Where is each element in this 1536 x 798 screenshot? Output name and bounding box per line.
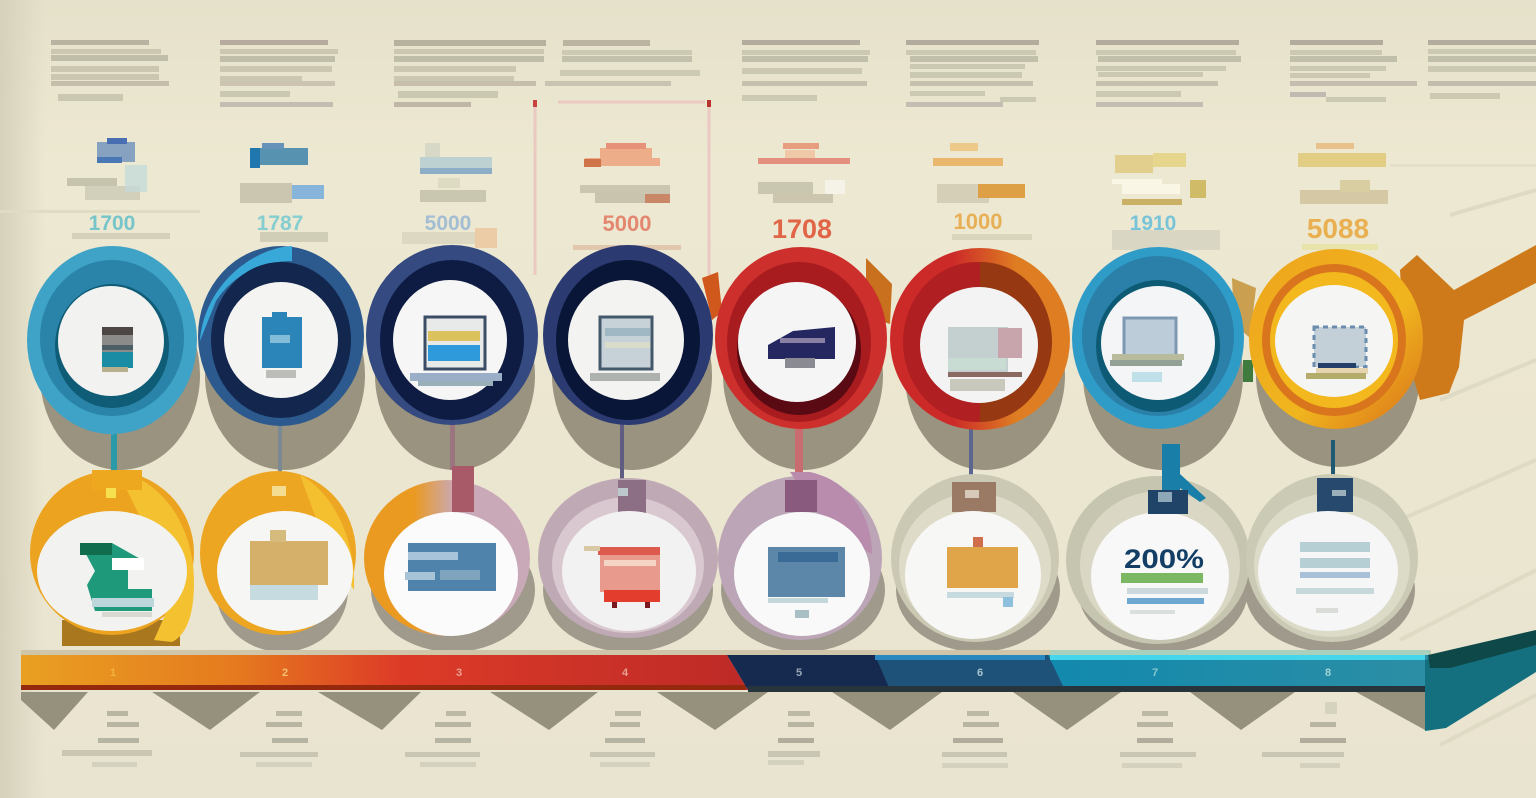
lower ring shadows — [216, 528, 1415, 652]
ring 8 — [1249, 249, 1423, 429]
icon: blue panel — [768, 547, 845, 618]
ring 2 — [198, 246, 364, 426]
caption 2 — [240, 711, 318, 767]
header 2 — [240, 143, 328, 242]
caption 1 — [62, 711, 152, 767]
icon: orange card — [947, 537, 1018, 607]
timeline bar — [21, 630, 1536, 731]
icon: shopping cart — [584, 546, 660, 608]
caption 5 — [768, 711, 820, 765]
bar segment: teal — [1048, 655, 1430, 690]
text block 9 — [1428, 40, 1536, 99]
icon: monitor — [948, 327, 1022, 391]
bar shadow — [21, 692, 1425, 730]
connector 8 — [1331, 440, 1335, 480]
bar labels: 8 — [1325, 667, 1331, 679]
ring 7 — [1072, 247, 1244, 429]
highlight frame — [533, 100, 711, 275]
upper rings — [27, 245, 1423, 435]
icon: van — [768, 327, 835, 368]
ring 1 — [27, 246, 197, 435]
header 4 — [573, 143, 681, 250]
header 8 — [1298, 143, 1388, 250]
caption 3 — [405, 711, 480, 767]
arrow head — [1425, 632, 1536, 731]
lower rings — [30, 466, 1418, 646]
icon: laptop small — [1110, 318, 1184, 382]
caption 8 — [1262, 702, 1346, 768]
icon: tan building — [250, 530, 328, 600]
bar segment: warm — [21, 655, 748, 690]
connector 1 — [111, 425, 117, 477]
bar labels: 4 — [622, 667, 629, 679]
bar labels: 2 — [282, 667, 288, 679]
text block 1 — [51, 40, 169, 101]
text block 2 — [220, 40, 338, 107]
text block 8 — [1290, 40, 1417, 102]
lower ring 4 — [538, 478, 718, 638]
text block 4 — [545, 40, 700, 86]
lower ring 1 — [30, 470, 194, 646]
text block 5 — [742, 40, 870, 101]
header 1: 1700 — [89, 212, 135, 235]
ring 3 — [366, 245, 538, 425]
caption 7 — [1120, 711, 1196, 768]
small accent tabs — [106, 486, 1346, 502]
connector 4 — [620, 420, 624, 480]
header 3 — [402, 143, 497, 248]
ring 6 — [890, 248, 1070, 430]
bar labels: 5 — [796, 667, 802, 679]
header 2: 1787 — [257, 212, 303, 235]
text block 3 — [394, 40, 546, 107]
bottom captions — [62, 702, 1346, 768]
connector 6 — [969, 425, 973, 475]
icon: laptop — [410, 317, 502, 386]
header 6 — [933, 143, 1032, 240]
header 7 — [1112, 153, 1220, 250]
step headers — [67, 138, 1388, 250]
header 7: 1910 — [1130, 212, 1176, 235]
icon: green chart — [80, 543, 154, 617]
icon: text lines — [1296, 542, 1374, 613]
lower ring 3 — [364, 466, 530, 636]
connector 7 with tag — [1148, 444, 1206, 514]
bar labels: 1 — [110, 667, 116, 679]
header 5 — [758, 143, 850, 244]
stat: 200%: 200% — [1124, 544, 1204, 574]
lower ring 8 — [1246, 474, 1418, 642]
lower ring 7 — [1066, 476, 1250, 644]
connectors — [111, 420, 1335, 480]
bar labels: 3 — [456, 667, 462, 679]
header 1 — [67, 138, 170, 239]
icon: screen — [590, 317, 660, 381]
icon: device — [102, 327, 133, 372]
bar labels — [110, 667, 1331, 679]
caption 4 — [590, 711, 655, 767]
lower ring 5 — [718, 472, 882, 640]
icon: blue chart — [405, 543, 496, 591]
icon: document — [262, 312, 302, 378]
bar segment: navy — [727, 655, 895, 690]
lower ring 6 — [891, 474, 1059, 642]
ring shadows — [40, 280, 1420, 470]
caption 6 — [942, 711, 1008, 768]
header 4: 5000 — [603, 211, 651, 236]
bar labels: 6 — [977, 667, 983, 679]
text block 7 — [1096, 40, 1241, 107]
header 8: 5088 — [1307, 213, 1369, 244]
ring 4 — [543, 245, 713, 425]
side connectors — [702, 258, 1256, 382]
connector 3 — [450, 420, 455, 470]
header 3: 5000 — [425, 212, 471, 235]
text block 6 — [906, 40, 1039, 107]
ring 5 — [715, 247, 887, 429]
bar labels: 7 — [1152, 667, 1158, 679]
connector 5 — [795, 420, 803, 480]
header 6: 1000 — [954, 209, 1002, 234]
top text columns — [51, 40, 1536, 107]
bar segment: blue — [875, 655, 1065, 690]
lower ring 2 — [200, 471, 356, 635]
connector 2 — [278, 420, 282, 475]
stat: 200% — [1121, 544, 1208, 614]
icon: tablet — [1306, 327, 1368, 379]
orange arrow ribbon — [1400, 245, 1536, 400]
header 5: 1708 — [772, 214, 832, 244]
